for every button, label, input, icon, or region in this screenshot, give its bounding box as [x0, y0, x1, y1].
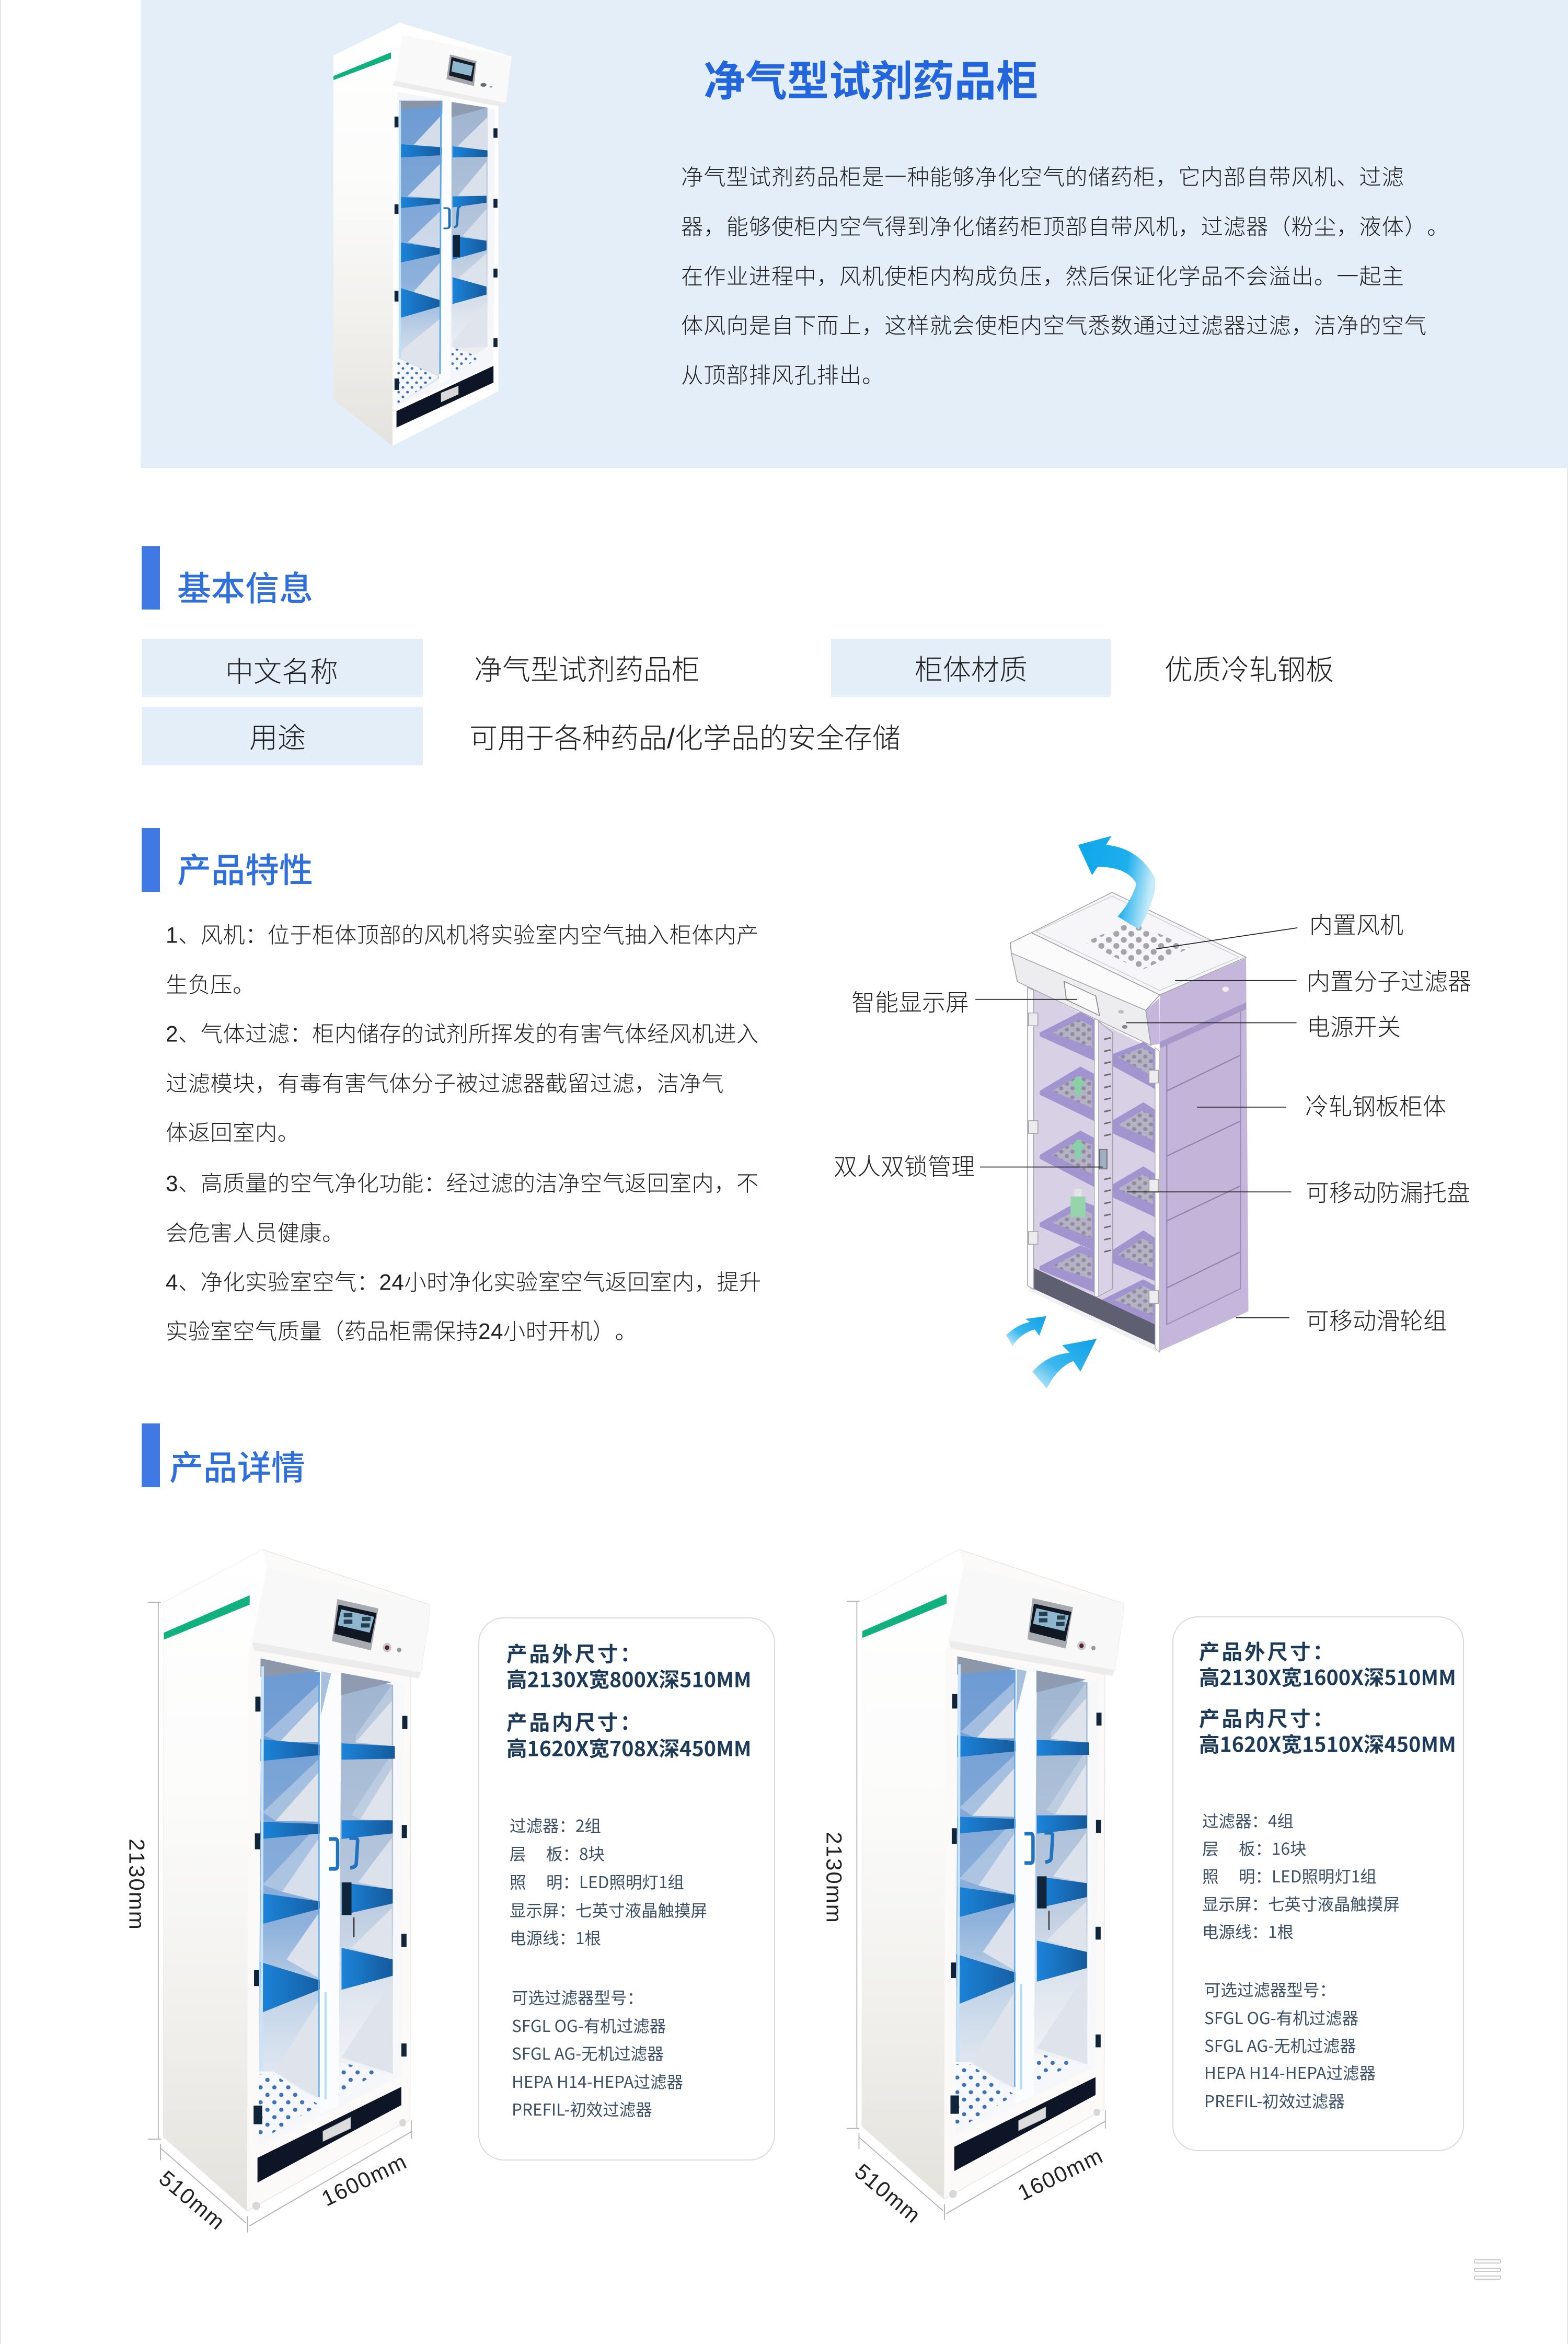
panel: product 1 specs: 可选过滤器型号： [512, 1985, 643, 2009]
text block: product features [166, 923, 762, 1343]
panel: basic info table: 柜体材质 [915, 654, 1028, 686]
panel: product 1 specs [479, 1618, 775, 2160]
panel: product 2 specs: SFGL AG-无机过滤器 [1204, 2033, 1356, 2057]
heading: product details [142, 1423, 305, 1487]
dimension labels: 510mm [850, 2159, 926, 2228]
panel: product 2 specs: HEPA H14-HEPA过滤器 [1204, 2060, 1376, 2084]
panel: product 2 specs: 电源线：1根 [1202, 1919, 1294, 1943]
icon: menu lines [1474, 2260, 1501, 2279]
intro paragraph: 从顶部排风孔排出。 [681, 363, 884, 388]
panel: basic info table: 净气型试剂药品柜 [474, 654, 700, 686]
panel: product 1 specs: 照 明：LED照明灯1组 [510, 1869, 684, 1893]
panel: product 1 specs: 高2130X宽800X深510MM [506, 1663, 751, 1694]
dimension labels [822, 1832, 1107, 2228]
panel: product 2 specs: 产品内尺寸： [1199, 1703, 1335, 1732]
panel: basic info table [142, 639, 1334, 765]
panel: product 1 specs: 显示屏：七英寸液晶触摸屏 [510, 1898, 707, 1922]
text block: product features: 2、气体过滤：柜内储存的试剂所挥发的有害气体经风机进入 [166, 1021, 759, 1047]
text block: product features: 过滤模块，有毒有害气体分子被过滤器截留过滤，洁净气 [166, 1072, 724, 1096]
illustration: cabinet [975, 836, 1297, 1388]
callout labels: 双人双锁管理 [834, 1153, 975, 1180]
panel: product 1 specs: PREFIL-初效过滤器 [512, 2097, 652, 2121]
intro paragraph: 在作业进程中，风机使柜内构成负压，然后保证化学品不会溢出。一起主 [681, 265, 1404, 289]
panel: basic info table: 中文名称 [225, 657, 338, 688]
panel: intro header [141, 0, 1568, 468]
panel: product 1 specs: 过滤器：2组 [510, 1813, 601, 1837]
callout labels [834, 912, 1471, 1334]
panel: basic info table: 用途 [249, 722, 306, 754]
text block: product features: 4、净化实验室空气：24小时净化实验室空气返回室内，提升 [166, 1270, 762, 1294]
panel: product 2 specs: 显示屏：七英寸液晶触摸屏 [1202, 1891, 1400, 1915]
dimension labels: 510mm [154, 2166, 230, 2235]
dimension labels [124, 1839, 411, 2235]
callout labels: 内置风机 [1309, 912, 1403, 939]
callout labels: 可移动滑轮组 [1306, 1308, 1447, 1334]
arrow: air inflow small [1006, 1316, 1046, 1346]
callout labels: 智能显示屏 [851, 989, 969, 1016]
dimension labels: 1600mm [318, 2148, 411, 2211]
callout labels: 内置分子过滤器 [1307, 968, 1471, 995]
panel: product 2 specs [1173, 1617, 1463, 2151]
text block: product features: 体返回室内。 [166, 1121, 299, 1145]
cabinet 1 photo [148, 1549, 430, 2233]
panel: product 2 specs: 照 明：LED照明灯1组 [1202, 1864, 1377, 1888]
panel: product 1 specs: 电源线：1根 [510, 1925, 601, 1949]
panel: product 2 specs: 高2130X宽1600X深510MM [1199, 1661, 1456, 1692]
callout labels: 电源开关 [1307, 1014, 1401, 1040]
heading: product details: 产品详情 [169, 1449, 305, 1487]
product 2: cabinet photo with dimensions [822, 1549, 1123, 2228]
heading: basic info [142, 546, 313, 610]
text block: product features: 1、风机：位于柜体顶部的风机将实验室内空气抽入柜体内产 [166, 923, 759, 947]
arrow: air inflow large [1032, 1339, 1097, 1388]
intro paragraph: 净气型试剂药品柜是一种能够净化空气的储药柜，它内部自带风机、过滤 [681, 165, 1404, 189]
panel: product 2 specs: 层 板：16块 [1202, 1836, 1307, 1860]
panel: product 2 specs: 高1620X宽1510X深450MM [1199, 1728, 1456, 1759]
callout labels: 冷轧钢板柜体 [1305, 1094, 1446, 1120]
dimension labels: 2130mm [124, 1839, 149, 1931]
panel: product 2 specs: 产品外尺寸： [1199, 1636, 1335, 1665]
intro paragraph: 体风向是自下而上，这样就会使柜内空气悉数通过过滤器过滤，洁净的空气 [681, 314, 1427, 338]
panel: product 1 specs: 高1620X宽708X深450MM [506, 1732, 751, 1763]
cabinet 2 photo [847, 1549, 1123, 2220]
text block: product features: 生负压。 [166, 972, 255, 997]
heading: product features [142, 828, 313, 892]
text block: product features: 实验室空气质量（药品柜需保持24小时开机）。 [166, 1319, 637, 1343]
panel: product 2 specs: PREFIL-初效过滤器 [1204, 2088, 1345, 2112]
diagram: cabinet structure [834, 836, 1471, 1388]
text block: product features: 会危害人员健康。 [166, 1221, 344, 1245]
heading: product features: 产品特性 [177, 851, 313, 890]
panel: basic info table: 优质冷轧钢板 [1165, 654, 1334, 686]
panel: product 1 specs: SFGL AG-无机过滤器 [512, 2041, 664, 2065]
panel: basic info table: 可用于各种药品/化学品的安全存储 [469, 723, 901, 754]
panel: product 1 specs: 产品内尺寸： [506, 1706, 643, 1737]
icon: cabinet photo (intro) [333, 23, 512, 446]
callout labels: 可移动防漏托盘 [1306, 1179, 1470, 1207]
intro paragraph [681, 165, 1449, 388]
intro paragraph: 器，能够使柜内空气得到净化储药柜顶部自带风机，过滤器（粉尘，液体）。 [681, 214, 1449, 239]
panel: product 1 specs: SFGL OG-有机过滤器 [512, 2013, 666, 2037]
text block: product features: 3、高质量的空气净化功能：经过滤的洁净空气返回室内，不 [166, 1171, 759, 1196]
dimension labels: 2130mm [822, 1832, 847, 1924]
title: 净气型试剂药品柜 [704, 59, 1038, 105]
panel: product 2 specs: 过滤器：4组 [1202, 1808, 1294, 1832]
panel: product 1 specs: 产品外尺寸： [506, 1638, 643, 1668]
heading: basic info: 基本信息 [177, 570, 313, 607]
product 1: cabinet photo with dimensions [124, 1549, 430, 2235]
panel: product 2 specs: SFGL OG-有机过滤器 [1204, 2005, 1358, 2029]
panel: product 2 specs: 可选过滤器型号： [1204, 1977, 1336, 2001]
dimension labels: 1600mm [1014, 2143, 1107, 2205]
arrow: air outflow [1078, 836, 1155, 929]
panel: product 1 specs: HEPA H14-HEPA过滤器 [512, 2069, 683, 2093]
panel: product 1 specs: 层 板：8块 [510, 1841, 605, 1865]
